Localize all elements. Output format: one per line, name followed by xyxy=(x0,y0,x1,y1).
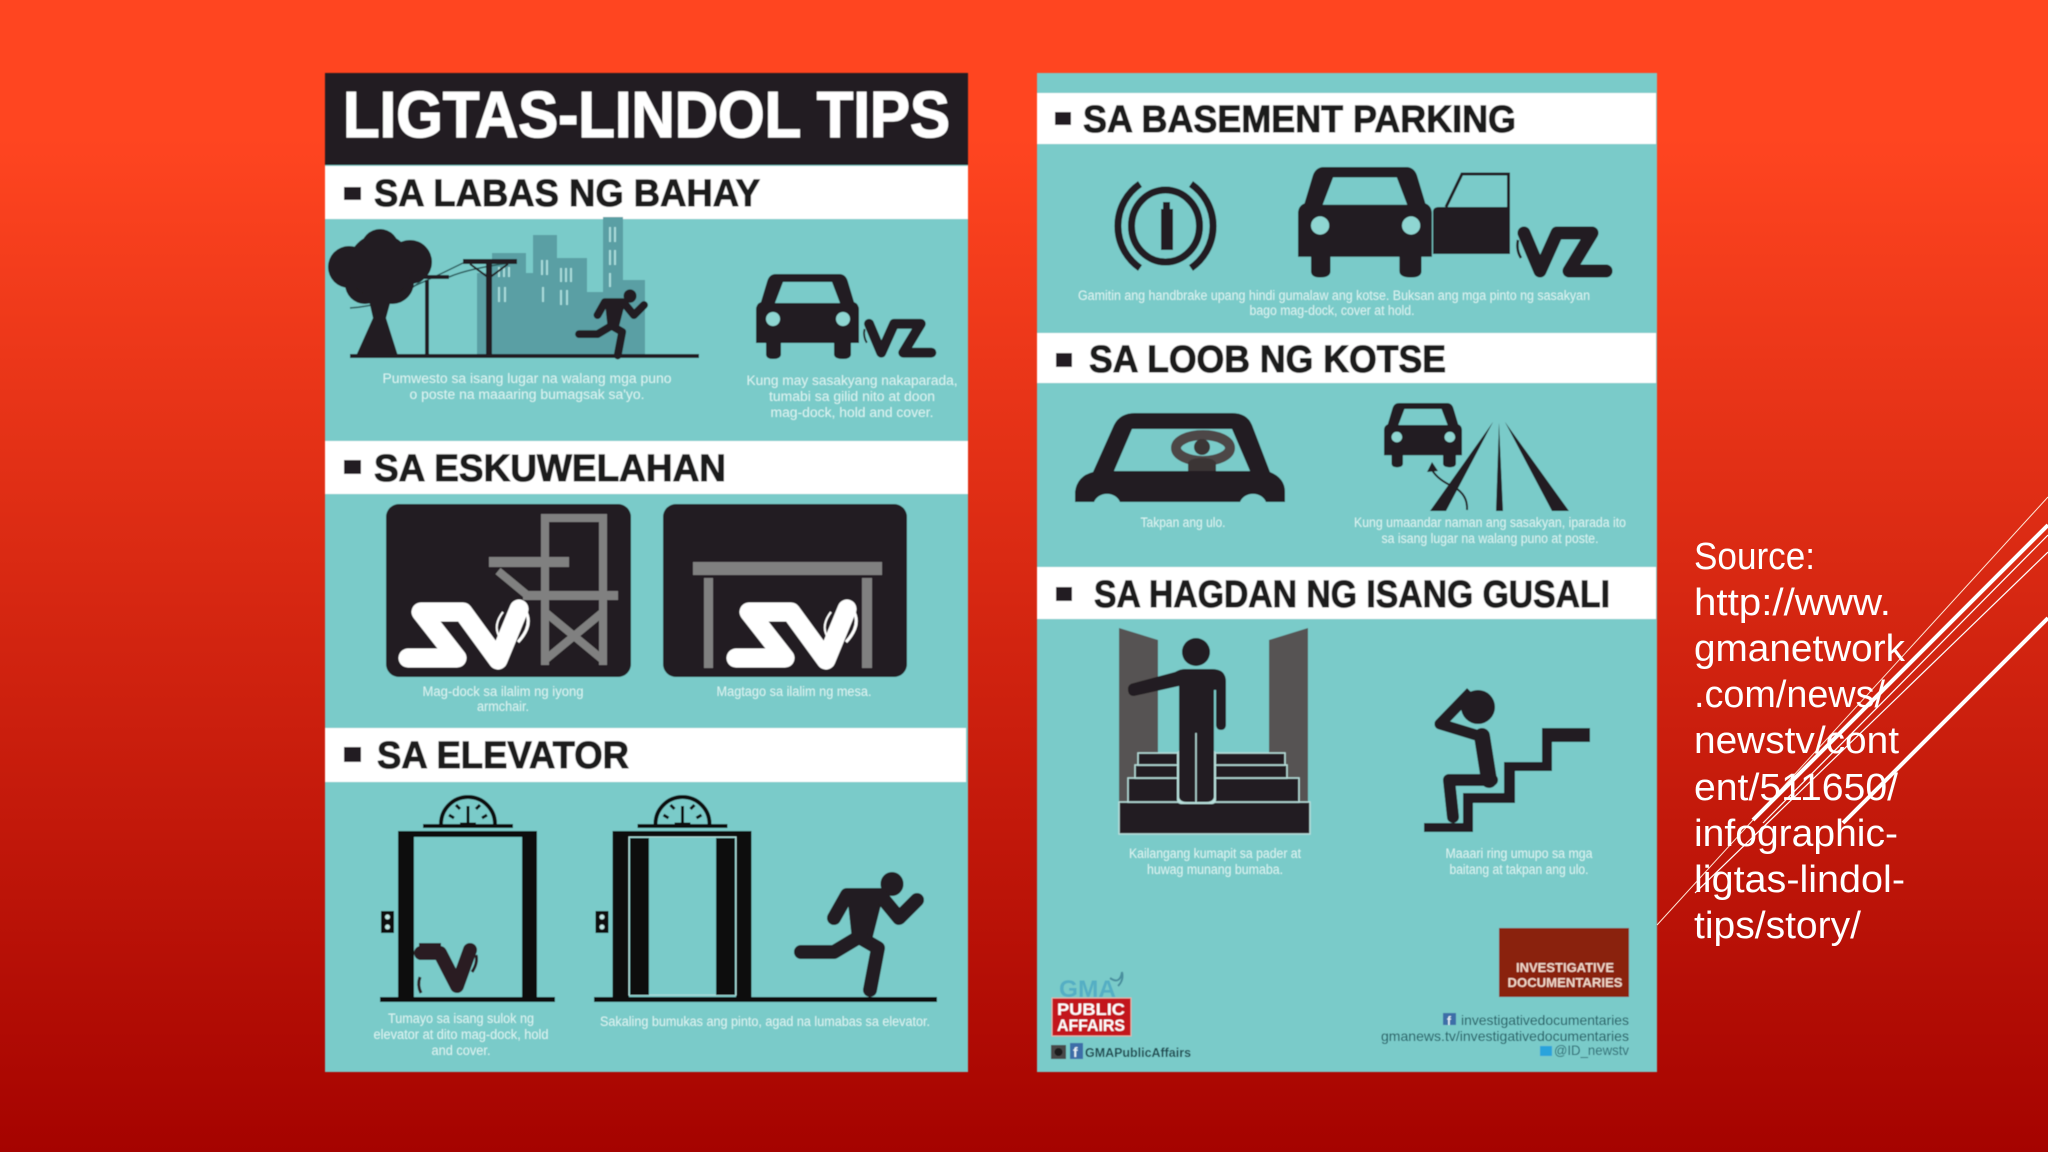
source text: tips/story/ xyxy=(1694,905,1861,947)
logo: investigative documentaries: INVESTIGATIVE xyxy=(1516,960,1614,975)
source text: newstv/cont xyxy=(1694,720,1899,762)
title: LIGTAS-LINDOL TIPS xyxy=(343,78,950,151)
caption: armchair: Mag-dock sa ilalim ng iyong xyxy=(422,684,584,699)
logo: investigative documentaries: DOCUMENTARIES xyxy=(1508,975,1623,990)
panel: right infographic xyxy=(1037,73,1657,1072)
caption: kailangang kumapit: huwag munang bumaba. xyxy=(1147,862,1283,877)
caption: armchair xyxy=(422,684,584,714)
caption: kung may sasakyang nakaparada: tumabi sa gilid nito at doon xyxy=(769,389,935,404)
caption: tumayo: and cover. xyxy=(432,1043,490,1058)
icon: large runner xyxy=(801,872,917,990)
social links: @ID_newstv xyxy=(1554,1042,1629,1058)
heading: sa labas ng bahay xyxy=(325,166,968,219)
caption: tumayo: elevator at dito mag-dock, hold xyxy=(374,1027,548,1042)
logo: gma public affairs: GMAPublicAffairs xyxy=(1085,1045,1191,1060)
heading: sa labas ng bahay: SA LABAS NG BAHAY xyxy=(374,173,760,215)
heading: sa loob ng kotse: SA LOOB NG KOTSE xyxy=(1089,339,1446,381)
caption: mesa: Magtago sa ilalim ng mesa. xyxy=(716,684,872,699)
heading: sa loob ng kotse xyxy=(1037,333,1656,383)
source text: http://www. xyxy=(1694,582,1891,624)
logo: investigative documentaries xyxy=(1499,928,1629,997)
caption: kung umaandar xyxy=(1354,515,1626,546)
caption: sakaling bumukas: Sakaling bumukas ang pinto, agad na lumabas sa elevator. xyxy=(600,1014,930,1029)
heading: sa basement parking xyxy=(1037,93,1656,144)
icon: small runner xyxy=(579,289,644,355)
source text: ligtas-lindol- xyxy=(1694,859,1905,901)
icon: city with tree, poles and runner xyxy=(328,217,699,358)
heading: sa elevator: SA ELEVATOR xyxy=(377,735,629,777)
source text: ent/511650/ xyxy=(1694,767,1898,809)
caption: tumayo: Tumayo sa isang sulok ng xyxy=(388,1011,534,1026)
caption: tumayo xyxy=(374,1011,548,1058)
heading: sa eskuwelahan: SA ESKUWELAHAN xyxy=(374,448,726,490)
icon: car with open door and crouching person xyxy=(1298,167,1606,278)
caption: armchair: armchair. xyxy=(477,699,529,714)
source text: gmanetwork xyxy=(1694,628,1906,670)
logo: gma public affairs: GMA xyxy=(1059,976,1116,1003)
caption: kung may sasakyang nakaparada: Kung may sasakyang nakaparada, xyxy=(746,373,958,388)
caption: pumwesto: Pumwesto sa isang lugar na walang mga puno xyxy=(382,371,672,386)
logo: gma public affairs: AFFAIRS xyxy=(1057,1016,1125,1035)
caption: kung umaandar: sa isang lugar na walang puno at poste. xyxy=(1382,531,1598,546)
logo: gma public affairs: f xyxy=(1073,1044,1078,1060)
icon: elevator with crouching person xyxy=(380,797,555,1002)
caption: gamitin ang handbrake xyxy=(1078,288,1590,318)
icon: handbrake warning xyxy=(1118,184,1213,268)
caption: kung umaandar: Kung umaandar naman ang sasakyan, iparada ito xyxy=(1354,515,1626,530)
social links: gmanews.tv/investigativedocumentaries xyxy=(1381,1028,1629,1044)
logo: gma public affairs: PUBLIC xyxy=(1057,1000,1125,1019)
logo: gma public affairs xyxy=(1051,972,1191,1060)
caption: maaari ring umupo: Maaari ring umupo sa mga xyxy=(1446,846,1593,861)
social links: investigativedocumentaries xyxy=(1461,1012,1629,1028)
caption: maaari ring umupo xyxy=(1446,846,1593,877)
heading: sa hagdan ng isang gusali: SA HAGDAN NG ISANG GUSALI xyxy=(1094,574,1610,616)
source text xyxy=(1694,536,1906,947)
heading: sa elevator xyxy=(325,728,966,782)
heading: sa basement parking: SA BASEMENT PARKING xyxy=(1083,99,1516,141)
source text: .com/news/ xyxy=(1694,674,1885,716)
icon: person covering head inside car xyxy=(1075,413,1285,502)
icon: open elevator with runner xyxy=(594,797,937,1002)
caption: gamitin ang handbrake: Gamitin ang handbrake upang hindi gumalaw ang kotse. Buksan ang mga pinto ng sasakyan xyxy=(1078,288,1590,303)
caption: gamitin ang handbrake: bago mag-dock, cover at hold. xyxy=(1250,303,1414,318)
caption: pumwesto: o poste na maaaring bumagsak sa'yo. xyxy=(410,387,644,402)
panel: left infographic xyxy=(325,73,968,1072)
source text: infographic- xyxy=(1694,813,1898,855)
caption: kailangang kumapit xyxy=(1129,846,1301,877)
icon: person seated on stairs xyxy=(1424,690,1590,832)
icon: person holding wall on stairs xyxy=(1119,628,1310,834)
icon: car pulling off road xyxy=(1384,403,1569,511)
source text: Source: xyxy=(1694,536,1815,578)
caption: kailangang kumapit: Kailangang kumapit sa pader at xyxy=(1129,846,1301,861)
heading: sa eskuwelahan xyxy=(325,441,968,494)
caption: pumwesto xyxy=(382,371,672,402)
social links: f xyxy=(1447,1014,1452,1028)
icon: car with crouching person xyxy=(756,274,931,359)
caption: takpan ang ulo: Takpan ang ulo. xyxy=(1140,515,1226,530)
caption: kung may sasakyang nakaparada: mag-dock, hold and cover. xyxy=(770,405,934,420)
caption: kung may sasakyang nakaparada xyxy=(746,373,958,420)
icon: person under armchair xyxy=(386,504,631,677)
caption: maaari ring umupo: baitang at takpan ang ulo. xyxy=(1450,862,1588,877)
icon: person under table xyxy=(663,504,907,677)
decorative diagonal lines xyxy=(1657,497,2048,925)
social links xyxy=(1381,1012,1629,1058)
